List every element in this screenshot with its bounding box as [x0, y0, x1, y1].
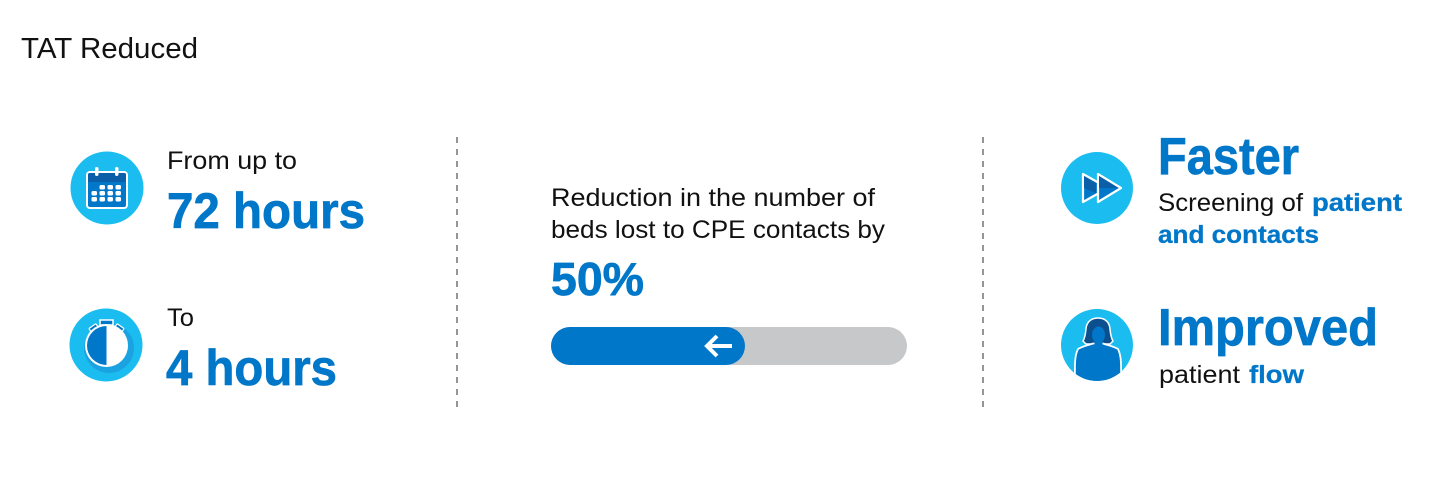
title: TAT Reduced: [21, 33, 198, 65]
text: reduction description: [551, 184, 886, 244]
text: screening: and contacts: [1158, 221, 1319, 249]
text: reduction description: beds lost to CPE contacts by: [551, 216, 886, 244]
stat: 50%: 50%: [551, 253, 644, 305]
text: patient flow: [1159, 361, 1305, 389]
icon: calendar: [70, 152, 144, 224]
text: patient flow: flow: [1249, 361, 1305, 389]
progress bar: [551, 327, 907, 365]
text: screening: Screening of: [1158, 189, 1303, 217]
icon: stopwatch: [70, 308, 142, 382]
panel: bed reduction: [551, 184, 907, 365]
icon: patient: [1061, 309, 1133, 384]
panel: benefits: [1061, 128, 1403, 389]
text: screening: [1158, 189, 1403, 249]
text: screening: patient: [1312, 189, 1403, 217]
icon: fast forward: [1061, 152, 1133, 224]
text: patient flow: patient: [1159, 361, 1240, 389]
icon: left arrow: [707, 336, 732, 356]
text: reduction description: Reduction in the number of: [551, 184, 875, 212]
heading: improved: Improved: [1158, 299, 1378, 357]
stat: 4 hours: 4 hours: [166, 340, 337, 396]
text: to: To: [167, 304, 194, 332]
text: from up to: From up to: [167, 147, 297, 175]
stat: 72 hours: 72 hours: [167, 183, 365, 239]
panel: turnaround time: [70, 147, 365, 396]
heading: faster: Faster: [1158, 128, 1299, 186]
